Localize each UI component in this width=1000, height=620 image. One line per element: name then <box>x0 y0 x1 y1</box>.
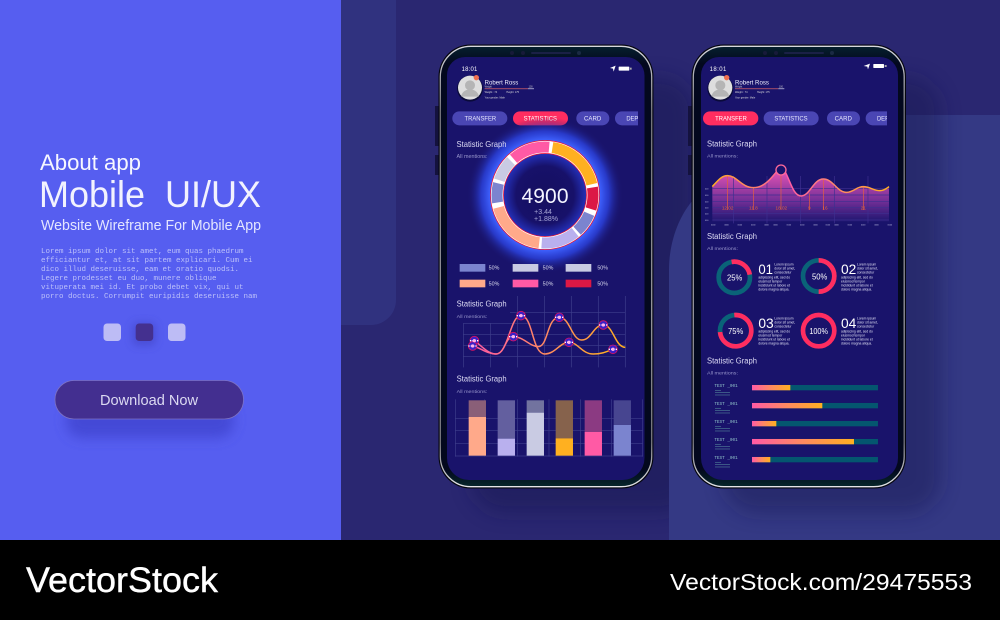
phone 1 legend: 50% <box>489 266 500 272</box>
phone 1 status bar and profile: 18:01 <box>462 67 478 73</box>
donut 75 percent: 75% <box>728 326 744 336</box>
phone 1 donut gauge: +1.88% <box>534 216 558 223</box>
background: dark right panel <box>341 0 1000 540</box>
phone 2 area chart: All mentions: <box>707 246 738 252</box>
phone 2 area chart: 9 <box>808 206 811 211</box>
phone 2 area chart: 12.02 <box>722 206 734 211</box>
phone 2 area chart: 0000 <box>764 224 770 226</box>
button: download now <box>55 380 244 438</box>
pagination dots <box>104 322 186 346</box>
phone 2 horizontal bars: TEST _001 <box>714 402 738 407</box>
donut 75 percent <box>719 314 795 348</box>
phone 2 tabs: DEP <box>877 116 889 123</box>
donut 100 percent: 100% <box>809 326 828 336</box>
left text block <box>39 150 261 301</box>
donut 75 percent: dolor sit amet, <box>774 320 795 324</box>
phone 2 area chart: 0000 <box>724 224 730 226</box>
paragraph: efficiantur et, at sit partem explicari. Cum ei <box>41 257 253 265</box>
phone 2 area chart: 0000 <box>834 224 840 226</box>
phone 1 tabs: STATISTICS <box>524 116 557 123</box>
donut 100 percent: adipiscing elit, sed do <box>841 330 873 334</box>
paragraph: Lorem ipsum dolor sit amet, eum quas phaedrum <box>41 248 244 256</box>
phone 2 area chart: Statistic Graph <box>707 232 757 241</box>
phone 1 status bar and profile: Robert Ross <box>485 80 519 87</box>
phone 2 status bar and profile: Your gender: Male <box>735 96 756 99</box>
donut 50 percent: dolor sit amet, <box>857 266 878 270</box>
donut 50 percent: dolore magna aliqua. <box>841 288 872 292</box>
donut 25 percent: dolor sit amet, <box>774 266 795 270</box>
phone 1 heading: statistic graph: Statistic Graph <box>456 140 507 149</box>
donut 100 percent: incididunt ut labore et <box>841 338 873 342</box>
paragraph: porro doctus. Corrumpit euripidis deseruisse nam <box>41 293 258 301</box>
phone 2 horizontal bars: TEST _001 <box>714 438 738 443</box>
donut 50 percent: 02 <box>841 261 857 277</box>
phone 1 status bar and profile: Height: 175 <box>506 91 520 94</box>
phone 1 line chart: Statistic Graph <box>457 300 507 309</box>
donut 25 percent: incididunt ut labore et <box>758 284 790 288</box>
footer logo: VectorStock <box>26 561 219 600</box>
phone 1 legend: 50% <box>543 281 554 287</box>
phone 2 horizontal bars: TEST _001 <box>714 384 738 389</box>
phone 2 area chart: 0000 <box>738 224 743 226</box>
phone 1 legend: 50% <box>489 281 500 287</box>
donut 100 percent <box>803 315 878 346</box>
phone 1 heading: statistic graph <box>456 140 507 160</box>
phone 1 status bar and profile: Weight : 74 <box>485 91 498 94</box>
phone 2 status bar and profile: 100 <box>779 86 784 88</box>
phone 1 status bar and profile: 100 <box>529 86 533 88</box>
phone 2 area chart: 0000 <box>848 224 853 226</box>
donut 25 percent: 25% <box>727 273 743 283</box>
paragraph <box>41 248 258 301</box>
phone 2 status bar and profile <box>707 64 887 102</box>
phone 2 area chart: 000 <box>705 201 709 203</box>
phone 2 status bar and profile: Weight : 74 <box>735 91 748 94</box>
paragraph: dico illud deseruisse, eam et oratio quodsi. <box>41 266 239 274</box>
shadow: phone 1 <box>470 77 695 513</box>
phone 2 area chart: Statistic Graph <box>707 140 757 149</box>
donut 25 percent: dolore magna aliqua. <box>758 288 789 292</box>
heading: about app: About app <box>40 150 141 175</box>
phone 2 area chart: 0000 <box>861 224 866 226</box>
phone 2 horizontal bars: TEST _001 <box>714 456 738 461</box>
subtitle: Website Wireframe For Mobile App <box>41 217 261 234</box>
phone 2 status bar and profile: Robert Ross <box>735 80 770 87</box>
title: mobile ui/ux: Mobile UI/UX <box>39 174 261 215</box>
phone 2 horizontal bars: All mentions: <box>707 370 738 376</box>
phone 2 percentage donuts <box>716 259 878 348</box>
phone 1 legend <box>460 264 608 287</box>
donut 25 percent: Lorem ipsum <box>774 262 794 266</box>
phone 2 tabs: TRANSFER <box>715 116 747 123</box>
phone 1 legend: 50% <box>597 266 608 272</box>
phone 2 tabs: CARD <box>835 116 852 123</box>
phone 1 status bar and profile <box>457 66 632 102</box>
button: download now: Download Now <box>100 392 198 409</box>
donut 100 percent: Lorem ipsum <box>857 316 876 320</box>
phone 2 area chart: 11.8 <box>749 206 758 211</box>
phone 2 area chart: 18.02 <box>775 206 788 211</box>
donut 100 percent: dolor sit amet, <box>857 320 878 324</box>
phone 1 donut gauge: 4900 <box>522 185 568 208</box>
donut 75 percent: dolore magna aliqua. <box>758 342 789 346</box>
donut 50 percent: incididunt ut labore et <box>841 284 873 288</box>
phone 2 area chart: 000 <box>705 214 709 216</box>
donut 100 percent: 04 <box>841 315 857 331</box>
phone 2 area chart <box>705 140 893 252</box>
phone 2 horizontal bars: Statistic Graph <box>707 356 757 365</box>
donut 25 percent: consectetur <box>774 270 792 274</box>
paragraph: vituperata mei id. Et probo debet vix, qui ut <box>41 284 244 292</box>
phone 2 area chart: 0000 <box>773 224 779 226</box>
phone 1 tabs: DEP <box>626 116 639 123</box>
phone 2 area chart: 0000 <box>888 224 893 226</box>
phone 2 horizontal bars: TEST _001 <box>714 420 738 425</box>
phone 2 area chart: 000 <box>705 220 709 222</box>
donut 75 percent: adipiscing elit, sed do <box>758 330 790 334</box>
phone 2 area chart: 16 <box>822 206 828 211</box>
phone 2 tabs <box>703 111 906 125</box>
background: upper left lighter shape <box>341 0 396 325</box>
paragraph: Legere prodesset eu duo, munere oblique <box>41 275 217 283</box>
donut 100 percent: dolore magna aliqua. <box>841 342 872 346</box>
donut 100 percent: eiusmod tempor <box>841 334 866 338</box>
phone 2 horizontal bars <box>707 356 878 467</box>
phone 2 area chart: 0000 <box>711 224 716 226</box>
phone 2 status bar and profile: Height: 175 <box>757 91 770 94</box>
phone 2 area chart: 000 <box>705 208 709 210</box>
donut 50 percent: 50% <box>812 271 828 281</box>
phone 2 status bar and profile: 18:01 <box>710 67 727 73</box>
phone 2 <box>688 44 906 488</box>
phone 1 donut gauge <box>467 117 623 273</box>
phone 2 area chart: 0000 <box>826 224 831 226</box>
phone 2 area chart: 0000 <box>787 224 792 226</box>
phone 1 legend: 50% <box>543 266 554 272</box>
donut 75 percent: incididunt ut labore et <box>758 338 790 342</box>
phone 2 area chart: 21 <box>861 206 866 211</box>
phone 1 status bar and profile: Weight <box>485 85 492 88</box>
donut 100 percent: consectetur <box>857 324 875 328</box>
phone 1 bar chart: All mentions: <box>457 389 487 395</box>
donut 75 percent: consectetur <box>774 324 792 328</box>
phone 2 area chart: 000 <box>705 195 709 197</box>
donut 25 percent <box>716 259 795 295</box>
donut 50 percent: eiusmod tempor <box>841 280 866 284</box>
phone 1 legend: 50% <box>597 281 608 287</box>
donut 50 percent: adipiscing elit, sed do <box>841 276 873 280</box>
phone 2 tabs: STATISTICS <box>774 116 808 123</box>
phone 2 area chart: 000 <box>705 189 709 191</box>
phone 2 area chart: 0000 <box>751 224 756 226</box>
footer bar <box>0 540 1000 620</box>
phone 1 tabs: TRANSFER <box>464 116 496 123</box>
donut 50 percent: consectetur <box>857 270 875 274</box>
phone 2 status bar and profile: Weight <box>735 85 743 88</box>
footer url: VectorStock.com/29475553 <box>670 569 972 595</box>
donut 75 percent: Lorem ipsum <box>774 316 794 320</box>
donut 25 percent: 01 <box>758 261 773 277</box>
phone 1 <box>435 44 655 488</box>
phone 2 area chart: 0000 <box>813 224 819 226</box>
phone 2 area chart: 0000 <box>874 224 880 226</box>
donut 75 percent: 03 <box>758 315 774 331</box>
donut 75 percent: eiusmod tempor <box>758 334 783 338</box>
phone 1 donut gauge: +3.44 <box>534 209 552 216</box>
phone 1 tabs: CARD <box>584 116 601 123</box>
phone 1 status bar and profile: Your gender: Male <box>485 96 505 99</box>
phone 1 bar chart: Statistic Graph <box>457 375 507 384</box>
phone 2 area chart: 0000 <box>800 224 805 226</box>
phone 1 line chart <box>457 296 625 367</box>
phone 1 line chart: All mentions: <box>457 314 487 320</box>
donut 25 percent: adipiscing elit, sed do <box>758 276 790 280</box>
phone 1 heading: statistic graph: All mentions: <box>456 154 488 160</box>
phone 1 bar chart <box>455 375 643 457</box>
donut 25 percent: eiusmod tempor <box>758 280 783 284</box>
phone 1 tabs <box>452 111 655 125</box>
background: lower right lighter shape <box>669 115 1000 540</box>
left panel <box>0 0 341 540</box>
donut 50 percent <box>803 260 878 292</box>
donut 50 percent: Lorem ipsum <box>857 262 876 266</box>
phone 2 area chart: All mentions: <box>707 154 738 160</box>
shadow: phone 2 <box>723 77 941 513</box>
